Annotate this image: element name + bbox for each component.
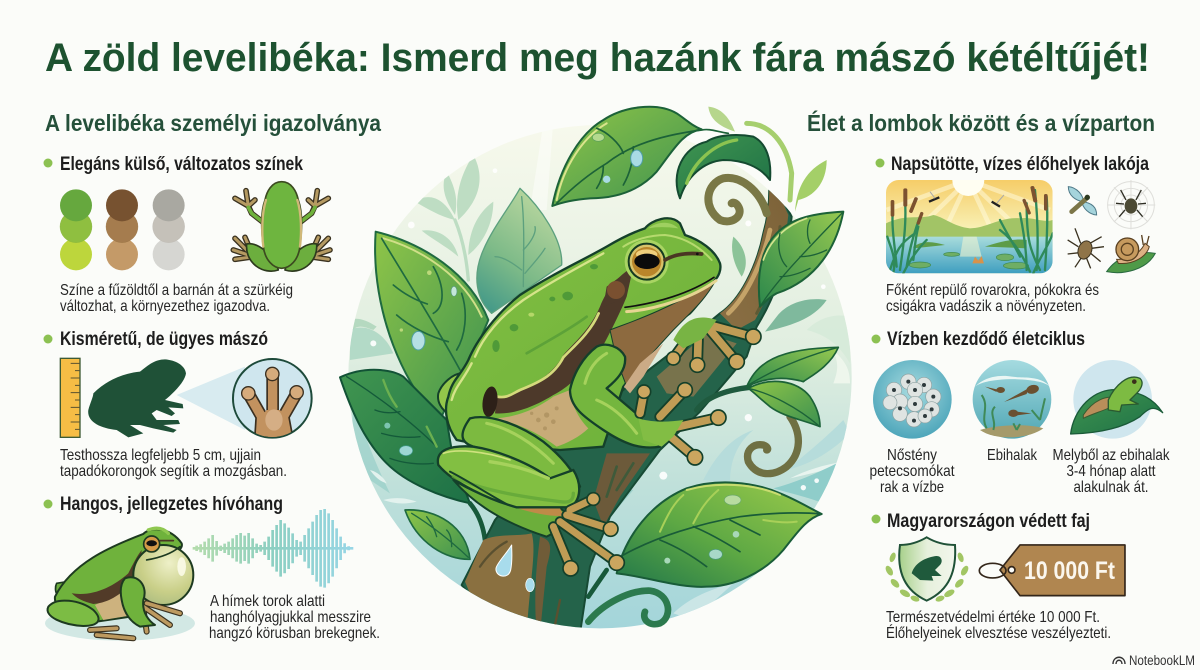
curled leaf xyxy=(677,135,770,198)
top leaf xyxy=(552,107,728,206)
upper hand xyxy=(673,317,753,365)
icon: tick-like spider xyxy=(1068,228,1104,268)
background circle xyxy=(348,125,852,628)
description: hangzó körusban brekegnek. xyxy=(209,625,380,642)
right column heading: Élet a lombok között és a vízparton xyxy=(807,109,1155,136)
tympanum xyxy=(607,281,625,299)
icon: calling frog xyxy=(45,528,195,641)
price tag: 10 000 Ft xyxy=(1024,557,1116,585)
description: Természetvédelmi értéke 10 000 Ft. xyxy=(886,609,1100,626)
panel: protected species xyxy=(872,511,1125,642)
pale background foliage xyxy=(350,120,850,620)
bullet xyxy=(44,158,52,168)
subheading: Hangos, jellegzetes hívóhang xyxy=(60,494,283,515)
vocal sac xyxy=(133,545,193,605)
upper vine in tan-brown xyxy=(720,190,788,328)
vine spiral xyxy=(708,178,767,221)
description: A hímek torok alatti xyxy=(210,593,325,610)
throat and chest xyxy=(610,282,715,387)
subheading: Magyarországon védett faj xyxy=(887,511,1090,532)
pale vine strip and pale leaves xyxy=(708,107,827,277)
subheading: Napsütötte, vízes élőhelyek lakója xyxy=(891,154,1149,175)
left column heading: A levelibéka személyi igazolványa xyxy=(45,110,381,136)
thigh xyxy=(438,446,579,507)
description: változhat, a környezethez igazodva. xyxy=(60,298,270,315)
panel: life cycle xyxy=(870,329,1170,496)
captions: Nőstény xyxy=(887,447,937,464)
icon: frog silhouette xyxy=(88,359,186,437)
captions: Melyből az ebihalak xyxy=(1052,447,1170,464)
arm xyxy=(121,577,155,627)
rear foot xyxy=(553,499,617,568)
dark lateral stripe xyxy=(495,267,633,413)
icon: froglet on leaf xyxy=(1071,360,1163,439)
subheading: Vízben kezdődő életciklus xyxy=(887,329,1085,350)
frog body xyxy=(446,218,720,450)
price tag xyxy=(979,545,1125,596)
bottom vine curl xyxy=(588,591,668,624)
belly xyxy=(497,390,588,447)
feet xyxy=(90,603,180,638)
subheading: Elegáns külső, változatos színek xyxy=(60,154,303,175)
description: Főként repülő rovarokra, pókokra és xyxy=(886,282,1099,299)
description: csigákra vadászik a növényzeten. xyxy=(886,298,1086,315)
dark band behind eye xyxy=(603,268,632,307)
description xyxy=(60,282,293,315)
left lower dark leaf xyxy=(340,370,485,540)
head bump highlight and pale back lines xyxy=(648,223,678,228)
pond scene xyxy=(886,180,1053,274)
bullet xyxy=(44,334,52,344)
colour swatches xyxy=(60,189,185,270)
description: Élőhelyeinek elvesztése veszélyezteti. xyxy=(886,623,1111,642)
central illustration: tree frog on a branch xyxy=(340,107,852,633)
icon: toe pad close-up xyxy=(233,359,312,443)
icon: frog seen from above xyxy=(233,182,330,271)
icon: sound wave xyxy=(193,509,353,588)
icon: shield with laurel xyxy=(884,537,970,603)
stripe xyxy=(72,550,142,604)
description xyxy=(60,447,287,480)
captions xyxy=(870,447,1170,496)
thigh xyxy=(48,601,99,626)
hip xyxy=(463,417,580,489)
captions: petecsomókat xyxy=(870,463,955,480)
icon: frog spawn xyxy=(873,360,952,439)
magnifier cone xyxy=(177,367,245,430)
captions: Ebihalak xyxy=(987,447,1038,464)
front arm xyxy=(570,345,660,448)
description: tapadókorongok segítik a mozgásban. xyxy=(60,463,287,480)
subheading: Kisméretű, de ügyes mászó xyxy=(60,329,268,350)
brown lower branch patches xyxy=(593,453,650,527)
description: hanghólyagjukkal messzire xyxy=(210,609,371,626)
frog xyxy=(438,218,761,576)
right leaf one xyxy=(759,212,843,307)
twig with two right leaves and curl xyxy=(697,347,838,474)
eye xyxy=(625,240,669,284)
lower hand xyxy=(638,390,718,457)
belly xyxy=(95,563,148,620)
branch and trunk xyxy=(462,170,792,633)
description: Testhossza legfeljebb 5 cm, ujjain xyxy=(60,447,261,464)
captions: rak a vízbe xyxy=(880,479,944,496)
body xyxy=(55,529,182,622)
icon: spider web xyxy=(1107,180,1155,229)
icon: tadpoles xyxy=(973,360,1051,439)
hind feet xyxy=(233,237,330,259)
eye line and nostril xyxy=(665,254,702,260)
captions: alakulnak át. xyxy=(1074,479,1148,496)
description: Színe a fűzöldtől a barnán át a szürkéig xyxy=(60,282,293,299)
muted background leaf xyxy=(477,188,562,313)
bullet xyxy=(44,500,52,508)
far hind leg bump xyxy=(438,373,462,413)
olive mid branch xyxy=(657,333,737,397)
back spots xyxy=(492,264,598,352)
panel: size and climbing xyxy=(44,329,312,480)
white sparkles xyxy=(370,168,826,490)
panel: appearance and colours xyxy=(44,154,330,315)
icon: dragonfly xyxy=(1068,187,1097,215)
eye xyxy=(144,536,160,552)
description xyxy=(886,282,1099,315)
description xyxy=(886,609,1111,642)
shank xyxy=(453,480,570,537)
left upper leaf xyxy=(375,232,488,420)
bottom right large leaf xyxy=(588,482,822,597)
bullet xyxy=(872,514,880,524)
panel: call xyxy=(44,494,380,642)
title: A zöld levelibéka: Ismerd meg hazánk fára mászó kétéltűjét! xyxy=(45,36,1150,80)
panel: habitat and diet xyxy=(876,154,1155,315)
icon: snail on leaf xyxy=(1107,235,1155,273)
bullet xyxy=(876,158,884,168)
lower left small leaf xyxy=(405,510,470,559)
mouth line xyxy=(627,281,716,312)
bullet xyxy=(872,334,880,344)
captions: 3-4 hónap alatt xyxy=(1066,463,1156,480)
icon: ruler xyxy=(60,358,80,437)
front limbs xyxy=(235,191,328,225)
description xyxy=(209,593,380,642)
